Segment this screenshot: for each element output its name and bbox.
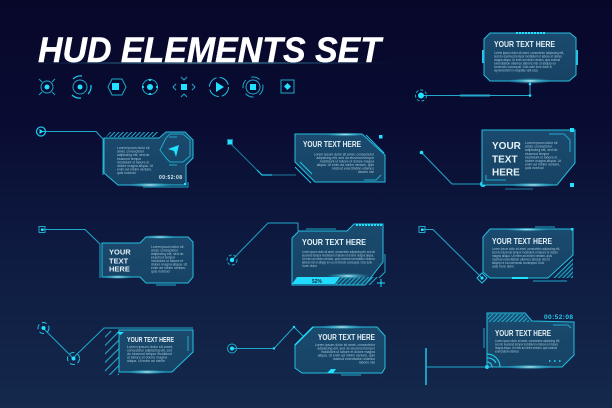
timer: 00:52:08 xyxy=(159,175,182,181)
panel: top right xyxy=(416,33,577,101)
panel: row three right xyxy=(419,226,574,283)
connector xyxy=(227,223,298,265)
body text: quis nostrud xyxy=(525,166,544,170)
panel: row three middle xyxy=(227,223,385,287)
body text: nostrud exercitation ullamco xyxy=(332,166,374,170)
connector xyxy=(228,140,296,175)
heading: YOUR TEXT HERE xyxy=(302,237,366,247)
heading: YOUR TEXT HERE xyxy=(127,337,174,344)
body text: exercitation ullamco laboris nisi ut aliquip ex xyxy=(494,62,556,66)
body text: adipiscing elit, sed do eiusmod tempor xyxy=(317,346,376,350)
body text: magna aliqua. Ut enim ad minim veniam, quis xyxy=(492,254,552,258)
body text xyxy=(127,345,173,363)
heading: YOUR TEXT HERE xyxy=(494,40,556,49)
body text: consectetur adipiscing elit, sed xyxy=(127,348,172,352)
connector xyxy=(420,151,486,187)
body text: enim ad minim veniam, xyxy=(525,163,560,167)
icon: ring with arcs xyxy=(72,76,91,98)
body text: aliquip ex ea commodo consequat. Duis xyxy=(492,261,544,265)
body text: aliqua. Ut enim ad minim veniam, quis xyxy=(317,163,374,167)
body text: ut labore et dolore magna xyxy=(127,356,167,360)
body text: quis nostrud xyxy=(151,270,170,274)
heading: YOUR TEXT HERE xyxy=(318,333,375,342)
progress bar: 52% xyxy=(312,279,323,285)
body text xyxy=(495,339,560,354)
heading: TEXT xyxy=(109,256,129,266)
body text: laboris nisi ut aliquip ex ea commodo consequat. Duis aute xyxy=(302,260,372,264)
icon: plus marker xyxy=(377,279,385,287)
body text: incididunt ut labore et dolore magna xyxy=(320,160,374,164)
heading: HERE xyxy=(492,168,520,178)
heading xyxy=(492,141,522,178)
body text: Lorem ipsum dolor sit amet, consectetur adipiscing elit, xyxy=(492,247,560,251)
body text xyxy=(117,146,153,175)
body text: aute irure dolor xyxy=(492,264,515,268)
body text xyxy=(492,247,560,268)
icon: diamond in square xyxy=(281,80,294,93)
icon: square with chevrons xyxy=(173,77,195,97)
body text: incididunt ut labore et xyxy=(151,259,183,263)
body text: laboris nisi xyxy=(358,170,374,174)
connector xyxy=(419,226,487,283)
body text: adipiscing elit, sed do eiusmod tempor xyxy=(316,156,375,160)
timer: 00:52:08 xyxy=(544,314,573,321)
body text: sed do eiusmod tempor incididunt ut labore et dolore xyxy=(492,250,558,254)
body text: aliqua. Ut enim ad minim veniam, quis xyxy=(318,354,375,358)
heading xyxy=(109,248,131,274)
body text: dolore magna aliqua. Ut xyxy=(117,164,153,168)
panel: row four right xyxy=(426,313,574,385)
body text: exercitation ullamco xyxy=(495,350,519,354)
heading: HERE xyxy=(109,264,130,274)
body text: magna aliqua. Ut enim ad minim veniam, quis nostrud xyxy=(494,58,560,62)
body text: do eiusmod tempor incididunt xyxy=(127,352,172,356)
connector xyxy=(39,226,100,278)
panel: row two middle xyxy=(228,132,385,183)
heading: YOUR xyxy=(109,248,131,256)
panel: row two left xyxy=(36,127,193,188)
connector xyxy=(416,81,531,101)
panel: row four left xyxy=(38,322,193,375)
body text: adipiscing elit, sed do xyxy=(151,252,184,256)
body text: Lorem ipsum dolor sit amet, consectetur xyxy=(314,152,375,156)
icon: hexagon with square xyxy=(108,79,126,95)
body text: Lorem ipsum dolor sit amet, consectetur xyxy=(315,343,376,347)
icon: ring with dots xyxy=(142,79,158,95)
body text: eiusmod tempor xyxy=(117,157,142,161)
body text xyxy=(314,152,375,174)
panel: right row two xyxy=(420,128,575,189)
body text xyxy=(302,250,375,268)
body text: quis nostrud xyxy=(117,171,136,175)
panel: row four middle xyxy=(228,324,385,375)
panel: row three left xyxy=(39,226,193,285)
body text: adipiscing elit, sed do xyxy=(525,148,558,152)
heading: YOUR xyxy=(492,141,522,152)
body text xyxy=(315,343,376,364)
body text xyxy=(151,245,187,274)
body text: Lorem ipsum dolor sit xyxy=(525,141,557,145)
connector xyxy=(36,127,103,175)
body text: Lorem ipsum dolor sit xyxy=(151,245,183,249)
body text: enim ad minim veniam, xyxy=(117,168,152,172)
body text: nostrud exercitation ullamco xyxy=(333,357,375,361)
body text: Lorem ipsum dolor sit amet, consectetur adipiscing elit, xyxy=(495,339,560,343)
body text xyxy=(525,141,561,170)
body text: dolore magna aliqua. Ut xyxy=(151,262,187,266)
body text: magna aliqua. Ut enim ad minim veniam, quis nostrud xyxy=(495,346,557,350)
body text: sed do eiusmod tempor incididunt ut labore et dolore xyxy=(494,54,562,58)
body text: Lorem ipsum dolor sit amet, xyxy=(127,345,173,349)
icon: wifi arcs xyxy=(486,354,500,368)
body text: aliqua. Ut enim ad minim xyxy=(127,359,165,363)
body text: Lorem ipsum dolor sit amet, consectetur adipiscing elit, sed do xyxy=(302,250,375,254)
body text: adipiscing elit, sed do xyxy=(117,153,150,157)
heading: YOUR TEXT HERE xyxy=(303,140,362,149)
octagon with arrow xyxy=(160,134,190,165)
body text: laboris nisi xyxy=(359,360,375,364)
title: HUD ELEMENTS SET xyxy=(38,31,384,70)
body text: commodo consequat. Duis aute irure dolor in xyxy=(494,65,552,69)
heading: TEXT xyxy=(492,154,518,166)
icon: square in arcs xyxy=(243,77,263,97)
icon: target with corner ticks xyxy=(39,79,55,95)
body text: eiusmod tempor incididunt ut labore et dolore magna aliqua. xyxy=(302,254,374,258)
heading: YOUR TEXT HERE xyxy=(495,329,551,338)
body text: enim ad minim veniam, xyxy=(151,266,186,270)
body text: nostrud exercitation ullamco laboris nisi ut xyxy=(492,258,550,262)
body text: eiusmod tempor xyxy=(525,152,550,156)
heading: YOUR TEXT HERE xyxy=(492,237,553,246)
connector xyxy=(228,326,303,353)
body text xyxy=(494,51,564,72)
progress bar xyxy=(292,277,378,285)
body text: irure dolor xyxy=(302,264,318,268)
icon row xyxy=(39,76,294,98)
body text: reprehenderit in voluptate velit esse xyxy=(494,68,538,72)
body text: amet, consectetur xyxy=(151,248,179,252)
body text: Lorem ipsum dolor sit amet, consectetur adipiscing elit, xyxy=(494,51,564,55)
body text: Ut enim ad minim veniam, quis nostrud exercitation ullamco xyxy=(302,257,375,261)
body text: amet, consectetur xyxy=(525,145,553,149)
body text: sed do eiusmod tempor incididunt ut labore et dolore xyxy=(495,342,558,346)
connector xyxy=(426,328,487,385)
connector xyxy=(38,322,193,364)
body text: incididunt ut labore et xyxy=(117,160,149,164)
body text: dolore magna aliqua. Ut xyxy=(525,159,561,163)
body text: incididunt ut labore et dolore magna xyxy=(321,350,375,354)
body text: incididunt ut labore et xyxy=(525,155,557,159)
icon: play in ring xyxy=(210,78,228,96)
body text: eiusmod tempor xyxy=(151,256,176,260)
body text: amet, consectetur xyxy=(117,150,145,154)
body text: Lorem ipsum dolor sit xyxy=(117,146,149,150)
